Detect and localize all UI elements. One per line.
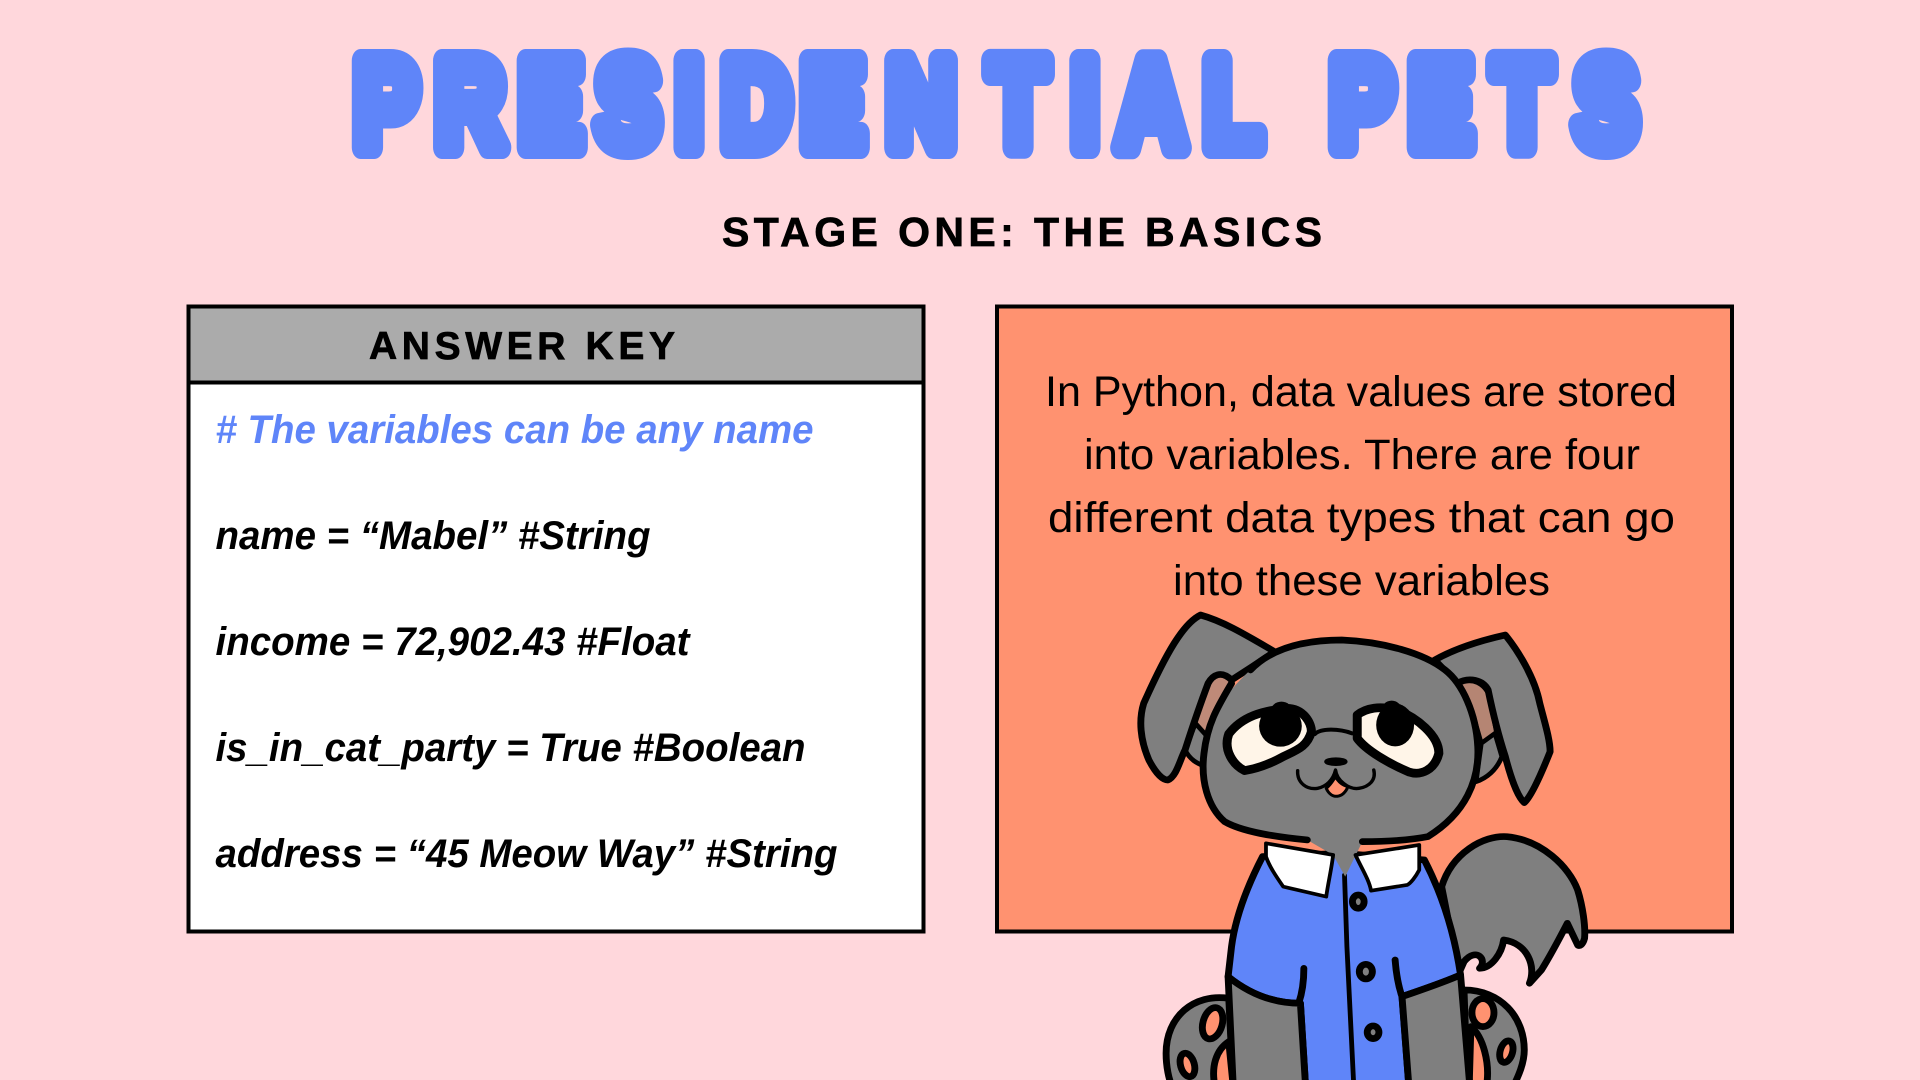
explanation background [997, 306, 1732, 932]
explanation text line 2: into variables. There are four [1084, 431, 1640, 479]
head [1203, 640, 1478, 877]
panel: explanation [997, 306, 1732, 932]
comment line: # The variables can be any name [216, 408, 814, 452]
sleeve fold right [1395, 960, 1402, 997]
code line: income: income = 72,902.43 #Float [216, 620, 691, 664]
left ear inner [1185, 674, 1232, 750]
right arm [1402, 975, 1470, 1080]
head outline [1203, 640, 1478, 842]
answer key heading: ANSWER KEY [369, 325, 675, 368]
code line: name: name = “Mabel” #String [216, 514, 650, 558]
left back paw [1166, 998, 1233, 1080]
tongue [1326, 777, 1348, 796]
left ear lower back [1185, 723, 1207, 766]
panel: answer key [188, 306, 924, 932]
explanation text line 1: In Python, data values are stored [1045, 368, 1677, 416]
right eye with glasses [1357, 701, 1439, 773]
glasses bridge [1315, 730, 1352, 734]
sleeve fold left [1299, 968, 1304, 1003]
nose [1326, 759, 1346, 765]
right back paw [1464, 990, 1524, 1080]
mouth [1298, 770, 1374, 789]
shirt buttons [1352, 895, 1379, 1039]
code line: is_in_cat_party: is_in_cat_party = True #Boolean [216, 726, 806, 770]
explanation text line 4: into these variables [1173, 557, 1550, 605]
title: PRESIDENTIAL PETS [354, 34, 1638, 175]
explanation text line 3: different data types that can go [1048, 494, 1675, 542]
right ear [1435, 635, 1550, 803]
shirt placket [1344, 875, 1354, 1080]
answer key body [188, 306, 924, 932]
right ear inner [1457, 681, 1497, 743]
left eye with glasses [1227, 702, 1311, 771]
right ear lower back [1476, 733, 1502, 782]
left arm [1228, 977, 1306, 1080]
shirt [1228, 853, 1461, 1080]
answer key header bar [188, 306, 924, 382]
left collar [1266, 843, 1333, 897]
left ear [1141, 615, 1275, 780]
tail [1442, 837, 1585, 983]
code line: address: address = “45 Meow Way” #String [216, 832, 838, 876]
subtitle: STAGE ONE: THE BASICS [722, 209, 1322, 255]
icon: dog mascot in shirt and glasses [1141, 615, 1585, 1080]
right collar [1356, 845, 1419, 891]
